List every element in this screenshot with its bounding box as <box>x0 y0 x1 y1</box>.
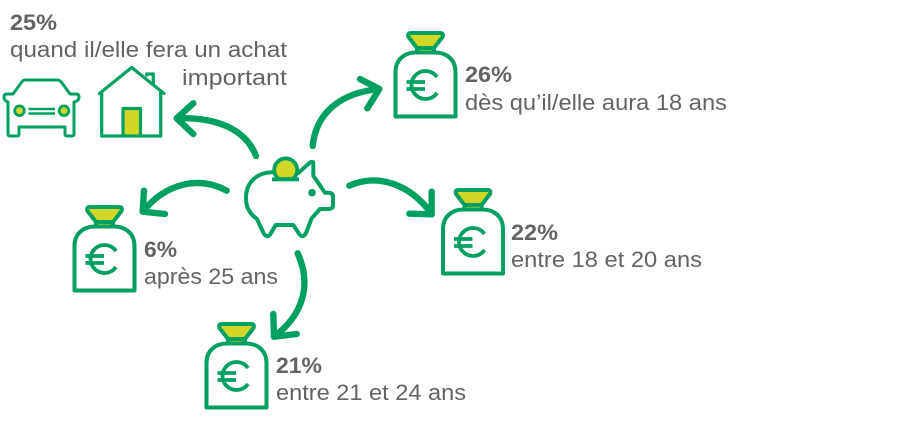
icon: house <box>100 68 164 136</box>
panel: bag 6% <box>74 207 278 290</box>
panel: bag 22% <box>443 190 702 274</box>
label entre 21 et 24 ans: entre 21 et 24 ans <box>276 380 466 405</box>
label 6%: 6% <box>144 237 177 262</box>
label 22%: 22% <box>511 220 558 245</box>
label quand il/elle fera un achat: quand il/elle fera un achat <box>10 37 287 62</box>
label 26%: 26% <box>465 62 512 87</box>
arrow to bag 26% <box>313 79 379 146</box>
panel: bag 21% <box>206 324 466 408</box>
icon: money bag <box>74 207 134 290</box>
icon: car <box>4 80 79 136</box>
label entre 18 et 20 ans: entre 18 et 20 ans <box>511 247 702 272</box>
arrow to bag 22% <box>349 181 432 214</box>
arrow to bag 6% <box>143 183 227 214</box>
panel: bag 26% <box>396 33 727 116</box>
icon: money bag <box>396 33 456 116</box>
label dès qu'il/elle aura 18 ans: dès qu’il/elle aura 18 ans <box>465 90 727 115</box>
panel: achat important <box>4 10 287 136</box>
arrow to bag 21% <box>273 253 304 337</box>
arrow to house <box>177 103 256 156</box>
icon: money bag <box>206 324 266 408</box>
label 21%: 21% <box>276 353 322 378</box>
icon: piggy bank <box>246 158 333 236</box>
label après 25 ans: après 25 ans <box>144 264 278 289</box>
label important: important <box>182 65 287 90</box>
label 25%: 25% <box>10 10 57 35</box>
icon: money bag <box>443 190 503 274</box>
